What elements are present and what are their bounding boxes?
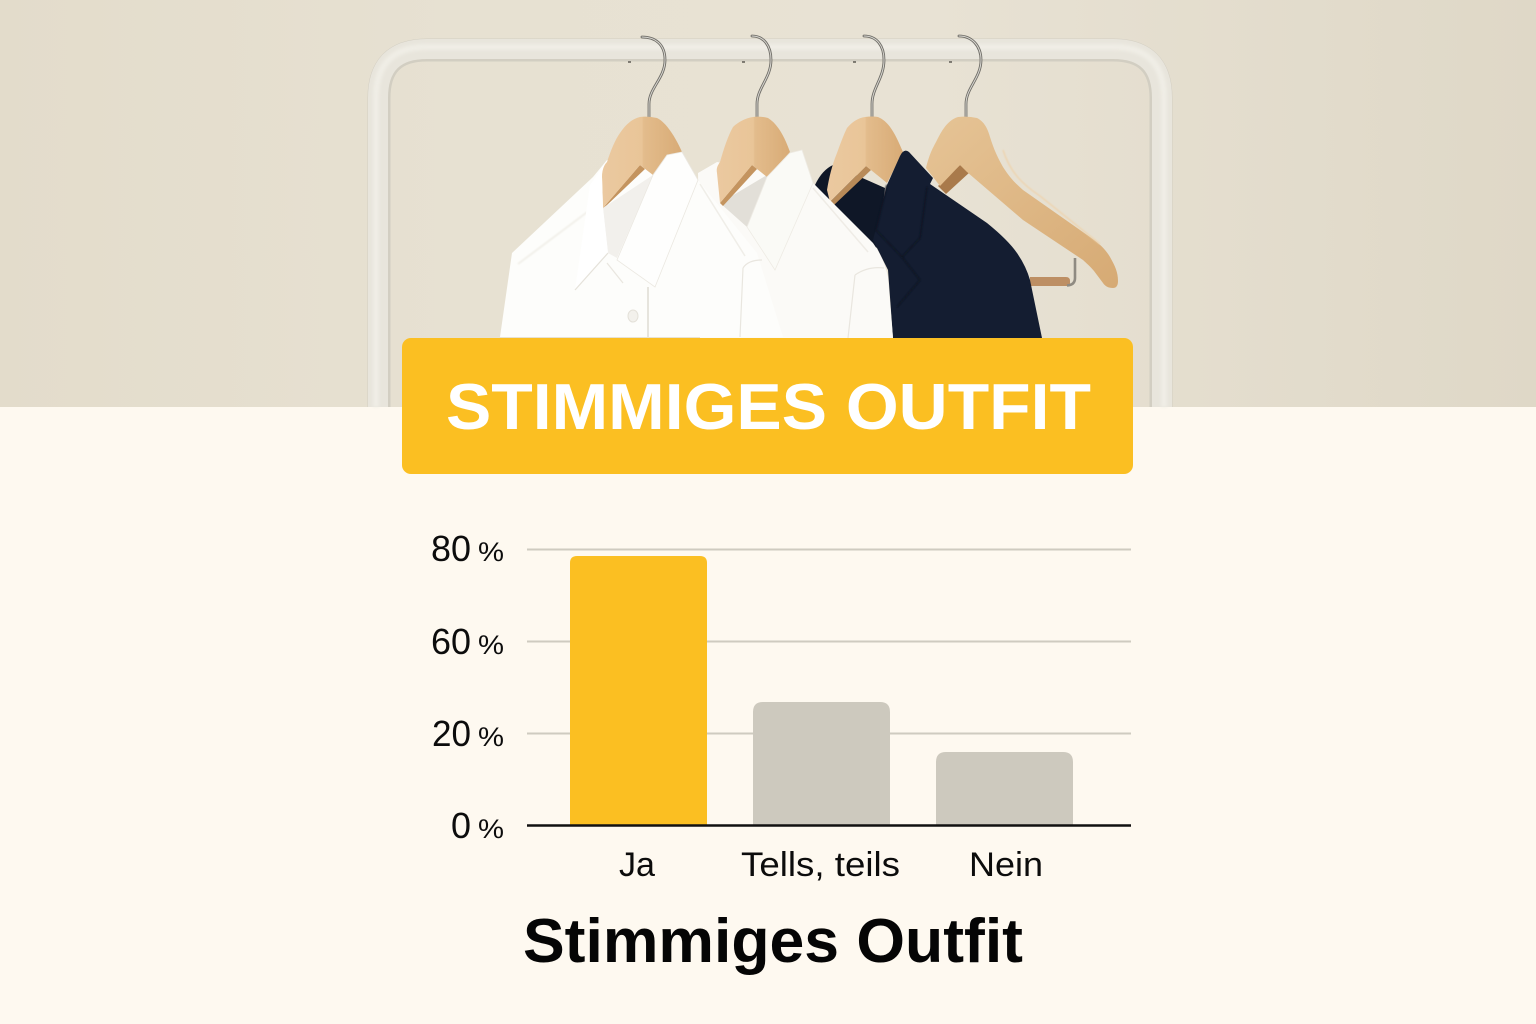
white shirt 2 body	[698, 150, 893, 338]
y axis labels: 0	[451, 805, 471, 846]
hanger 2	[717, 117, 790, 206]
bar: Nein	[936, 752, 1073, 825]
panel: cream lower background	[0, 407, 1536, 1024]
x axis labels	[619, 846, 1043, 884]
clothes rack	[376, 47, 1164, 407]
hanger 4 with trouser bar	[926, 117, 1118, 288]
white shirt 2 collar	[747, 150, 813, 270]
bar: Teils, teils	[753, 702, 890, 825]
x axis labels: Nein	[969, 846, 1043, 884]
y axis labels	[431, 528, 504, 846]
navy blazer front	[873, 151, 1042, 338]
bar: Ja	[570, 556, 707, 825]
hanger hooks	[642, 36, 981, 118]
bar chart	[431, 528, 1131, 884]
y axis labels: 60	[431, 621, 471, 662]
white shirt 1 collars	[575, 152, 698, 290]
y axis labels: %	[478, 630, 504, 660]
y axis labels: %	[478, 537, 504, 567]
hanger 3	[827, 116, 903, 205]
button	[628, 310, 638, 322]
y axis labels: %	[478, 722, 504, 752]
title banner	[402, 338, 1133, 474]
hanger 1	[602, 117, 682, 208]
panel: photo background wall	[0, 0, 1536, 407]
navy blazer back and neck	[815, 165, 885, 250]
y axis labels: 80	[431, 528, 471, 569]
banner title: STIMMIGES OUTFIT	[446, 370, 1091, 443]
y axis labels: %	[478, 814, 504, 844]
x axis labels: Tells, teils	[741, 846, 900, 884]
white shirt 1 body	[500, 155, 783, 337]
chart title: Stimmiges Outfit	[523, 907, 1023, 976]
x axis labels: Ja	[619, 846, 655, 884]
y axis labels: 20	[432, 713, 471, 754]
